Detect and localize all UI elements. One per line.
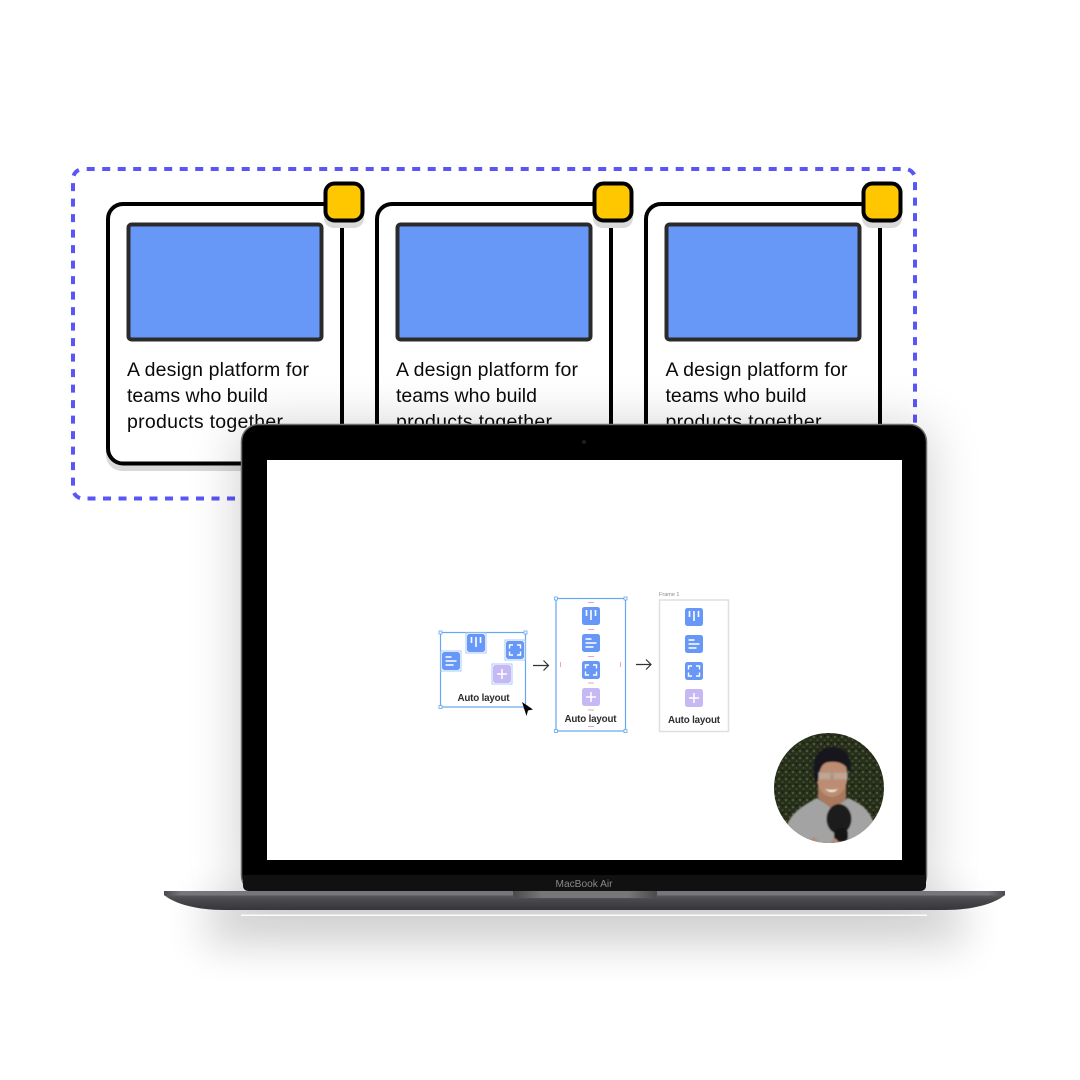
dashed selection frame (73, 169, 915, 498)
card 2 text: teams who build (396, 385, 537, 407)
laptop base (164, 891, 1005, 910)
card 1 yellow handle shadow (324, 188, 364, 228)
microphone handle (834, 828, 848, 842)
hinge notch (513, 891, 657, 898)
microphone body (826, 804, 852, 834)
icon: align (441, 651, 461, 671)
hedge background (774, 733, 884, 843)
card 1 body (108, 204, 342, 464)
brand label: MacBook Air (556, 878, 613, 890)
auto layout diagram (439, 592, 728, 732)
card 2 (375, 184, 633, 471)
card 2 body (377, 204, 611, 464)
step 2: auto layout frame (554, 597, 627, 732)
laptop lid (242, 424, 926, 892)
icon: bars (685, 608, 703, 626)
laptop base top edge (164, 891, 1005, 896)
card 3 text: A design platform for (666, 359, 848, 381)
laptop chin (243, 875, 926, 891)
cursor (522, 702, 533, 716)
card 2 yellow handle shadow (593, 188, 633, 228)
laptop base reflection (241, 914, 927, 916)
face (816, 755, 848, 797)
frame name: Frame 1 (659, 592, 679, 598)
card 1 text: teams who build (127, 385, 268, 407)
step 2 frame handles (554, 597, 627, 732)
icon: bars (466, 633, 486, 653)
step 2 label: Auto layout (564, 714, 617, 725)
card 1 yellow handle (326, 184, 362, 220)
step 2 frame (556, 598, 626, 731)
icon: bars (582, 607, 600, 625)
icon: expand (582, 661, 600, 679)
card 3 image placeholder (666, 224, 860, 340)
card 3 (644, 184, 902, 471)
arrow 2 (636, 660, 651, 670)
card 3 text: products together (666, 411, 822, 433)
card 1 shadow (106, 209, 344, 471)
icon: plus (492, 664, 512, 684)
step 3: finished frame (659, 592, 728, 732)
icon: plus (582, 688, 600, 706)
step 3 label: Auto layout (668, 715, 721, 726)
card 3 text: teams who build (666, 385, 806, 407)
laptop (164, 424, 1005, 916)
laptop ground shadow (205, 896, 965, 946)
card 1 text: A design platform for (127, 359, 310, 381)
card 3 body (646, 204, 880, 464)
icon: align (582, 634, 600, 652)
card 2 text: A design platform for (396, 359, 578, 381)
neck (818, 785, 846, 809)
arrow 1 (533, 660, 548, 670)
camera (582, 440, 586, 444)
icon: plus (685, 689, 703, 707)
card 2 shadow (375, 209, 613, 471)
step 1 frame (440, 632, 526, 707)
hands (808, 837, 840, 843)
screen (267, 460, 902, 860)
step 1: unordered frame (439, 631, 533, 716)
icon: expand (505, 640, 525, 660)
glasses (819, 773, 847, 779)
presenter avatar (774, 733, 884, 845)
card 3 shadow (644, 209, 882, 471)
card 1 (106, 184, 364, 471)
laptop shadow (241, 428, 927, 898)
shirt (786, 797, 874, 843)
card 2 image placeholder (398, 224, 590, 340)
step 1 label: Auto layout (458, 693, 510, 704)
spacing ticks (560, 602, 620, 726)
card 1 image placeholder (128, 224, 322, 340)
icon: expand (685, 662, 703, 680)
step 1 frame handles (439, 631, 527, 708)
card 3 yellow handle (864, 184, 900, 220)
card 1 text: products together (127, 411, 284, 433)
card 3 yellow handle shadow (862, 188, 902, 228)
hair (813, 747, 851, 782)
icon: align (685, 635, 703, 653)
card 2 text: products together (396, 411, 552, 433)
card 2 yellow handle (594, 184, 632, 220)
step 3 frame (660, 600, 728, 732)
smile (825, 789, 838, 792)
